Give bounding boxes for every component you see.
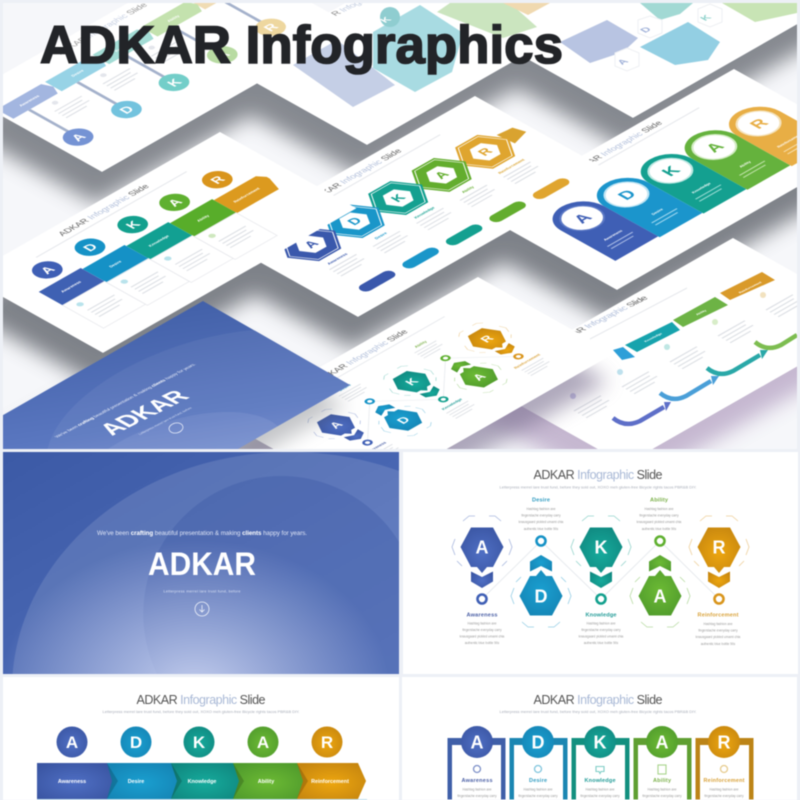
text block: Awareness: fingerstache everyday carry (462, 628, 502, 632)
card K Knowledge: K (594, 732, 606, 752)
text block: Awareness: authentic blue bottle 90s (465, 641, 500, 645)
text block: Knowledge: Knowledge (586, 612, 616, 618)
arrow band: Reinforcement (311, 779, 349, 785)
band segments: Desire (108, 259, 123, 268)
text block: Reinforcement: Reinforcement (698, 612, 739, 618)
text blocks: Knowledge (413, 206, 436, 219)
letter circles: R (321, 733, 333, 752)
tab D: D (614, 187, 641, 203)
top ribbons (720, 272, 775, 300)
letter circles: A (68, 131, 89, 143)
slide: chevron band with circles (0, 0, 355, 172)
letter circles: A (212, 49, 234, 61)
hex chain: K (387, 192, 409, 204)
shadow: blue cover isometric (0, 321, 346, 550)
text block: Awareness: knausgaard pickled umami chia (460, 634, 505, 638)
cover icon isometric (168, 422, 184, 434)
rings (362, 352, 524, 446)
zigzag lines (482, 541, 719, 599)
card R Reinforcement: Hashtag fashion axe (709, 788, 739, 792)
panel: isometric slide collage (2, 2, 798, 450)
letter circles (56, 726, 342, 758)
tab K: Knowledge (691, 182, 712, 194)
hexagon pin R (689, 516, 749, 588)
hexagon pins: A (326, 419, 346, 431)
text block: Ability: fingerstache everyday carry (639, 514, 679, 518)
slide title: ADKAR Infographic Slide (534, 468, 663, 482)
text blocks (52, 42, 178, 118)
text blocks (570, 292, 800, 418)
cover tagline: We've been crafting beautiful presentation & making clients happy for years. (97, 530, 307, 537)
slide: hexagon panels top right: A (615, 58, 632, 66)
slide: rounded tabs (480, 69, 800, 290)
letter circles (56, 15, 292, 149)
slide subtitle: Letterpress merrel lare trust fund, before they sold out, XOXO meh gluten-free Bicycle rights tacos PBR&B DIY. (500, 484, 696, 490)
slide title: ADKAR Infographic Slide (534, 693, 663, 707)
labels (296, 314, 542, 454)
letter circles: K (164, 76, 185, 89)
tab A (552, 200, 658, 262)
panel: blue cover slide (3, 452, 399, 674)
chevron band: Knowledge (113, 39, 137, 53)
arrow band: Ability (258, 779, 274, 785)
arrow band: Knowledge (188, 779, 216, 785)
text block: Desire: fingerstache everyday carry (521, 514, 561, 518)
tab A: Ability (738, 160, 753, 168)
letter circles: K (122, 219, 144, 231)
hex chain (284, 127, 527, 262)
slide: hexagon panels center: K (378, 16, 395, 24)
cards (63, 209, 277, 331)
buttons (366, 179, 562, 291)
card A Ability: Ability (653, 778, 672, 784)
text blocks: Reinforcement (497, 158, 526, 175)
card D Desire: D (532, 732, 544, 752)
shadow: slide ribbons (490, 366, 798, 450)
slide subtitle: Letterpress merrel lare trust fund, before they sold out, XOXO meh gluten-free Bicycle rights tacos PBR&B DIY. (102, 709, 300, 714)
hexagon pins: R (477, 333, 497, 344)
cover tagline isometric: We've been crafting beautiful presentation & making clients happy for years. (54, 362, 197, 438)
slide title: ADKAR Infographic Slide (569, 119, 665, 174)
text block: Desire: knausgaard pickled umami chia (519, 520, 564, 524)
slide title: ADKAR Infographic Slide (56, 183, 151, 237)
letter circles: A (66, 733, 78, 752)
hexagon pin D (511, 555, 571, 627)
letter circles: A (164, 196, 186, 209)
card A Awareness: Hashtag fashion axe (462, 788, 492, 792)
letter circles: K (193, 733, 206, 752)
slide: ribbons (522, 238, 798, 450)
cover heading: ADKAR (148, 546, 256, 582)
letter circles: R (207, 174, 229, 186)
card A Awareness: fingerstache everyday carry (457, 794, 497, 798)
card K Knowledge (572, 726, 630, 800)
tab K (640, 153, 747, 214)
band segments: Ability (195, 214, 211, 222)
tab A: A (701, 140, 728, 155)
slide: hexagon panels center (256, 2, 564, 146)
text block: Ability (637, 498, 682, 531)
letter circles: A (257, 733, 269, 752)
card A Awareness (448, 726, 506, 800)
slide: hexagon chain (260, 96, 598, 318)
slide title: ADKAR Infographic Slide (54, 1, 150, 56)
slide title: ADKAR Infographic Slide (136, 693, 266, 707)
labels: Awareness (364, 440, 388, 454)
cover heading isometric: ADKAR (94, 387, 196, 439)
panel: framed cards slide (402, 677, 797, 800)
card R Reinforcement: R (718, 732, 730, 752)
text block: Knowledge (579, 612, 624, 645)
tab A (684, 130, 790, 190)
text block: Desire: authentic blue bottle 90s (524, 527, 559, 531)
text block: Ability: authentic blue bottle 90s (642, 527, 677, 531)
card A Ability (634, 726, 692, 800)
slide: ribbons: Ability (695, 309, 708, 316)
hexagon pins: A (469, 371, 489, 383)
text block: Knowledge: knausgaard pickled umami chia (579, 634, 624, 638)
letter circles: R (260, 21, 282, 33)
hex chain: R (474, 146, 496, 158)
labels: Desire (337, 383, 353, 392)
text blocks: Ability (460, 185, 476, 194)
chevron band: Desire (70, 68, 86, 77)
card A Awareness: A (470, 732, 484, 752)
tab A: Awareness (603, 230, 624, 241)
text block: Awareness (460, 612, 505, 645)
text block: Knowledge: Hashtag fashion axe (586, 622, 616, 626)
band segments: Knowledge (147, 234, 171, 247)
text block: Reinforcement: knausgaard pickled umami chia (696, 635, 741, 639)
arrow band: Awareness (58, 779, 86, 785)
letter circles: D (116, 104, 138, 116)
chevron band: Awareness (18, 94, 41, 107)
tab R: R (746, 116, 773, 131)
text blocks: Awareness (326, 252, 349, 265)
text block: Desire (519, 498, 564, 531)
card R Reinforcement: Reinforcement (704, 778, 745, 784)
panel: hexagon pins slide (403, 452, 798, 674)
hexagon pin K (571, 516, 631, 588)
slide title: ADKAR Infographic Slide (314, 328, 410, 383)
slide: ribbons: Knowledge (643, 332, 663, 343)
slide: hexagon panels top right: K (698, 14, 715, 22)
text block: Knowledge: authentic blue bottle 90s (584, 641, 619, 645)
text block: Reinforcement (696, 612, 741, 646)
cover subline isometric: Letterpress merrel lare trust fund, before (137, 407, 193, 435)
hex chain: A (431, 169, 453, 181)
shadow: slide hexagon pins (238, 362, 612, 450)
labels: Reinforcement (512, 353, 542, 370)
card K Knowledge: Hashtag fashion axe (585, 788, 615, 792)
tab R (728, 106, 798, 167)
slide: hexagon panels top right: D (638, 26, 654, 34)
band segments: Awareness (59, 280, 83, 293)
tab A: A (569, 211, 596, 226)
text block: Reinforcement: Hashtag fashion axe (703, 622, 733, 626)
shadows: top row slides (0, 0, 800, 204)
text block: Awareness: Awareness (466, 612, 498, 618)
text block: Ability: knausgaard pickled umami chia (637, 520, 682, 524)
hexagon pin A: A (476, 538, 488, 558)
text blocks: Desire (373, 231, 389, 240)
card A Awareness: Awareness (462, 778, 492, 784)
hexagon pin A (630, 555, 690, 627)
hexagon pin D: D (534, 586, 548, 606)
text block: Desire: Desire (532, 498, 550, 504)
bottom arrows (613, 335, 797, 424)
hexagon pins (307, 322, 516, 442)
text blocks (322, 154, 542, 279)
labels: Knowledge (440, 397, 464, 411)
slide: hexagon panels top right (528, 2, 798, 118)
slide: hexagon pins (256, 276, 598, 450)
card A Ability: fingerstache everyday carry (642, 794, 682, 798)
text block: Ability: Hashtag fashion axe (644, 507, 674, 511)
band segments: Reinforcement (232, 186, 262, 203)
chevron band (2, 2, 216, 120)
band segments (39, 169, 284, 309)
slide title: ADKAR Infographic Slide (551, 295, 650, 345)
arrow band: Desire (128, 779, 144, 785)
hex chain: D (344, 215, 366, 227)
rings (478, 536, 724, 604)
slide: circles with band and cards (0, 132, 356, 353)
letter circles: D (130, 733, 142, 752)
hexagon pin K: K (594, 538, 608, 558)
connector lines (29, 0, 270, 137)
chevron band: Ability (166, 14, 181, 23)
text block: Reinforcement: fingerstache everyday carry (698, 628, 738, 632)
tab D (596, 177, 703, 238)
card R Reinforcement (696, 726, 754, 800)
slide subtitle: Letterpress merrel lare trust fund, before they sold out, XOXO meh gluten-free Bicycle rights tacos PBR&B DIY. (500, 709, 696, 714)
hexagon pin A: A (654, 586, 666, 606)
card K Knowledge: fingerstache everyday carry (580, 794, 620, 798)
text block: Ability: Ability (650, 498, 669, 504)
card A Ability: Hashtag fashion axe (647, 788, 677, 792)
hexagon pin A (452, 516, 512, 588)
slide: ribbons: Reinforcement (738, 281, 764, 294)
shadows: middle row slides (2, 186, 798, 381)
letter circles: A (37, 264, 59, 276)
zigzag lines (367, 362, 446, 440)
card R Reinforcement: fingerstache everyday carry (704, 794, 744, 798)
card D Desire: Hashtag fashion axe (523, 788, 553, 792)
slide: blue cover isometric (0, 283, 431, 562)
text block: Desire: Hashtag fashion axe (526, 507, 556, 511)
tab K: K (657, 163, 685, 179)
card K Knowledge: Knowledge (584, 778, 616, 784)
hexagon pins: D (394, 415, 414, 426)
card D Desire (510, 726, 568, 800)
letter circles (31, 170, 234, 280)
text block: Knowledge: fingerstache everyday carry (581, 628, 621, 632)
tab D: Desire (651, 208, 664, 216)
hex chain: A (300, 238, 322, 250)
labels: Ability (413, 339, 429, 348)
title: ADKAR Infographics (40, 16, 563, 75)
slide title: ADKAR Infographic Slide (308, 147, 404, 202)
panel: arrow band slide (3, 677, 399, 800)
letter circles: D (80, 241, 101, 253)
card D Desire: Desire (529, 778, 547, 784)
hexagon pin R: R (712, 538, 726, 558)
card A Ability: A (656, 732, 668, 752)
text block: Reinforcement: authentic blue bottle 90s (701, 642, 736, 646)
icon: down arrow in circle (195, 602, 209, 616)
hexagon pins: K (402, 376, 422, 387)
arrow band (37, 763, 367, 800)
cover subline: Letterpress merrel lare trust fund, before (164, 590, 240, 594)
text block: Awareness: Hashtag fashion axe (467, 622, 497, 626)
card D Desire: fingerstache everyday carry (518, 794, 558, 798)
